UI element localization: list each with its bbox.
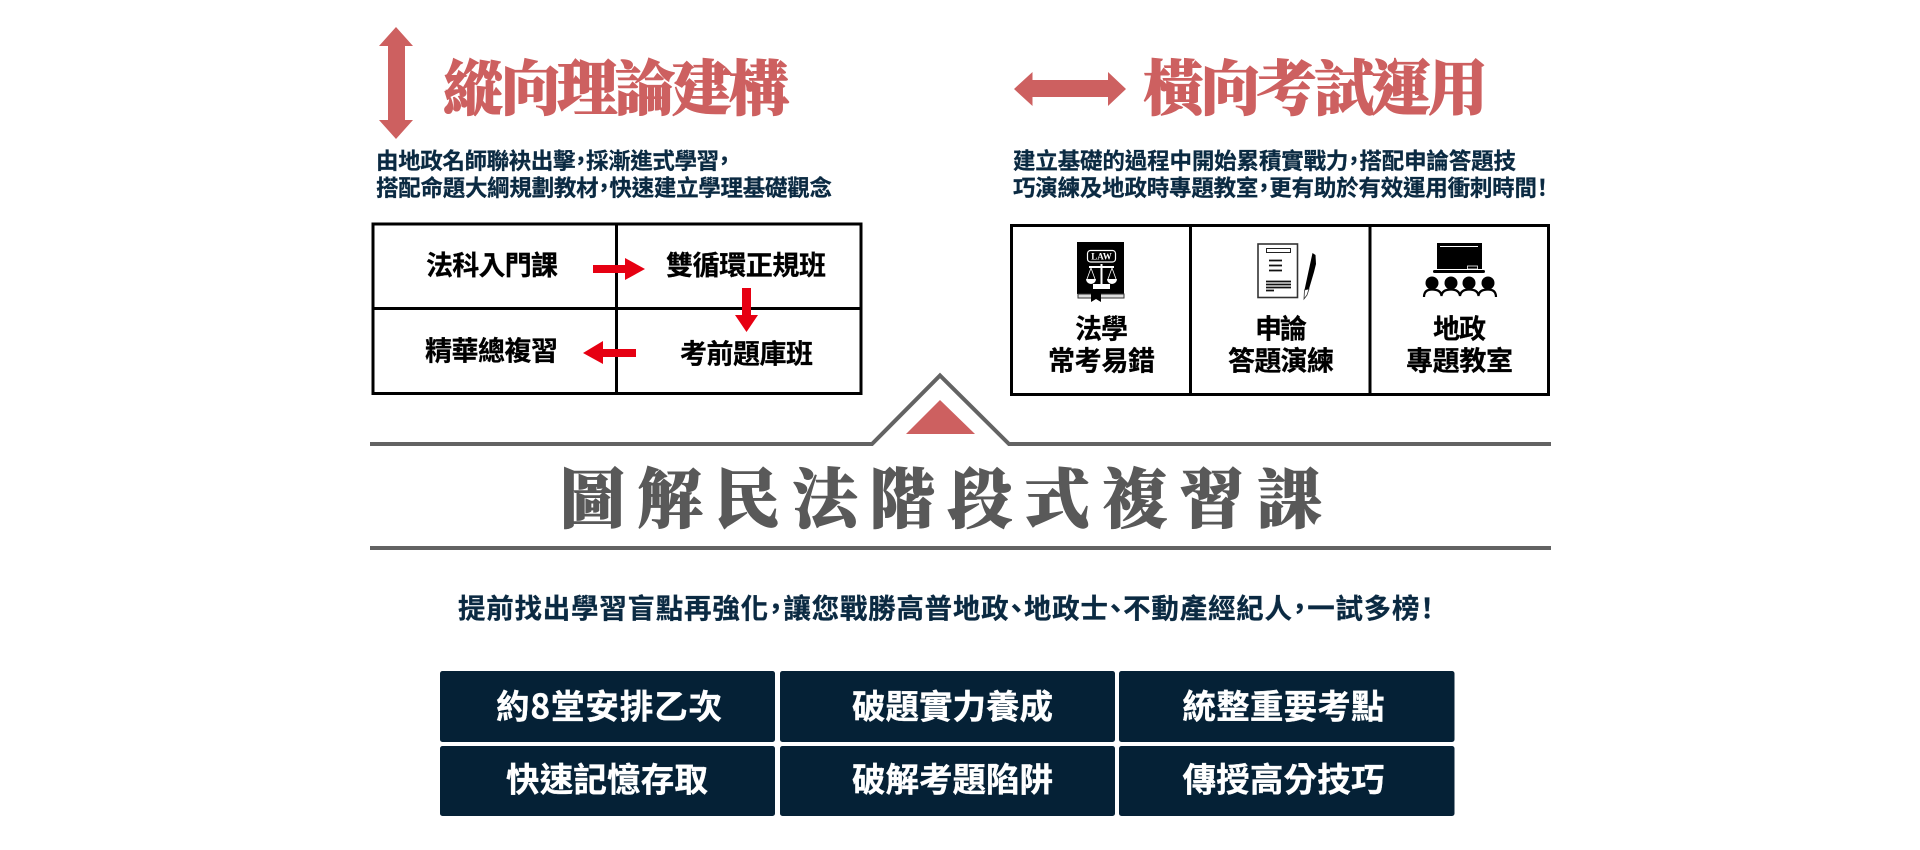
label: essay practice xyxy=(1228,308,1334,378)
course: question bank: 考前題庫班 xyxy=(680,332,813,372)
label: land policy topics: 專題教室 xyxy=(1406,340,1513,378)
label: land policy topics: 地政 xyxy=(1433,308,1486,346)
button: question traps xyxy=(780,746,1115,816)
divider: roofline with peak xyxy=(370,376,1551,444)
panel: vertical theory building xyxy=(373,27,861,394)
button: schedule xyxy=(440,671,775,742)
label: essay practice: 答題演練 xyxy=(1228,340,1334,378)
icon: classroom with audience xyxy=(1424,243,1496,297)
arrow: down xyxy=(735,288,758,332)
text block: vertical intro xyxy=(376,144,832,203)
label: law errors: 法學 xyxy=(1075,308,1128,346)
button: key points xyxy=(1119,671,1454,742)
icon: red triangle xyxy=(906,400,975,434)
arrow: vertical double-headed xyxy=(379,27,413,139)
text block: horizontal intro xyxy=(1013,144,1548,203)
divider: under title xyxy=(370,546,1551,550)
text block: horizontal intro: 巧演練及地政時專題教室，更有助於有效運用衝刺時間！ xyxy=(1013,171,1548,203)
button: question-solving skills xyxy=(780,671,1115,742)
heading: horizontal exam application: 橫向考試運用 xyxy=(1143,42,1488,128)
button: high-score techniques: 傳授高分技巧 xyxy=(1182,752,1384,802)
label: essay practice: 申論 xyxy=(1255,308,1307,346)
label: land policy topics xyxy=(1406,308,1513,378)
course: regular class: 雙循環正規班 xyxy=(666,244,826,283)
arrow: horizontal double-headed xyxy=(1014,72,1126,106)
button: memory access xyxy=(440,746,775,816)
label: law errors: 常考易錯 xyxy=(1048,340,1155,378)
text block: vertical intro: 由地政名師聯袂出擊，採漸進式學習， xyxy=(376,144,730,176)
table: course sequence xyxy=(373,224,861,394)
icon: law book: LAW xyxy=(1091,252,1112,262)
button: memory access: 快速記憶存取 xyxy=(506,752,708,802)
text block: vertical intro: 搭配命題大綱規劃教材，快速建立學理基礎觀念 xyxy=(376,171,832,203)
table: three study resources xyxy=(1012,225,1548,394)
arrow: left xyxy=(583,341,636,364)
button: high-score techniques xyxy=(1119,746,1454,816)
button: question traps: 破解考題陷阱 xyxy=(852,752,1053,802)
button: key points: 統整重要考點 xyxy=(1182,680,1384,728)
title: 圖解民法階段式複習課 xyxy=(560,447,1322,541)
button: question-solving skills: 破題實力養成 xyxy=(852,680,1053,728)
label: law errors xyxy=(1048,308,1155,378)
arrow: right xyxy=(593,258,645,280)
icon: essay sheet and pen xyxy=(1258,244,1316,299)
course: essence review: 精華總複習 xyxy=(425,330,558,368)
text block: tagline: 提前找出學習盲點再強化，讓您戰勝高普地政、地政士、不動產經紀人，一試多榜！ xyxy=(458,586,1434,626)
text block: horizontal intro: 建立基礎的過程中開始累積實戰力，搭配申論答題技 xyxy=(1013,144,1516,176)
button: schedule: 約8堂安排乙次 xyxy=(496,680,722,728)
panel: feature buttons xyxy=(440,671,1454,816)
icon: law book xyxy=(1077,242,1124,302)
heading: vertical theory building: 縱向理論建構 xyxy=(443,42,789,128)
course: intro to law: 法科入門課 xyxy=(426,244,558,283)
panel: horizontal exam application xyxy=(1012,42,1548,394)
